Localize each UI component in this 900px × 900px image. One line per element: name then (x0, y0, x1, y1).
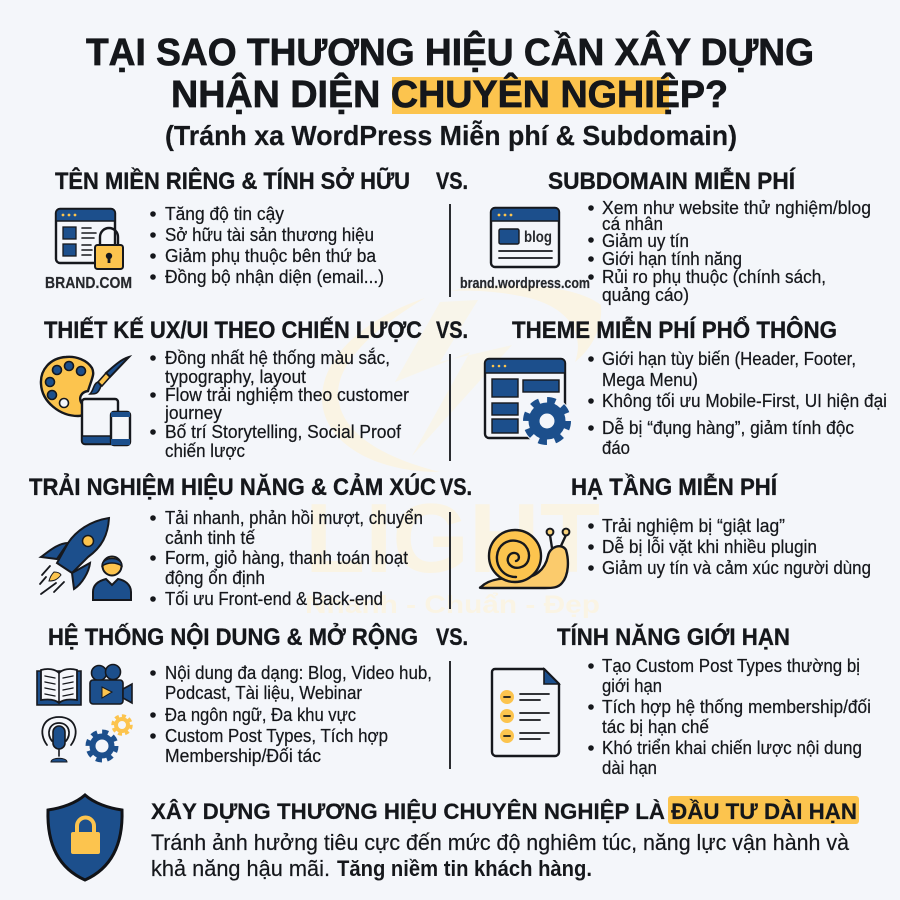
bullet list: free subdomain: Rủi ro phụ thuộc (chính sách, (602, 266, 826, 287)
bullet list: performance and emotion: động ổn định (165, 567, 265, 588)
bullet list: strategic UX/UI: journey (164, 402, 223, 423)
watermark logo: Nhanh - Chuẩn - Đẹp (305, 591, 600, 619)
vs labels: VS. (440, 474, 472, 501)
bullet list: limited features: Tích hợp hệ thống membership/đối (602, 696, 871, 717)
bullet list: content system: Podcast, Tài liệu, Webinar (165, 682, 362, 703)
bullet list: free subdomain: Giảm uy tín (602, 230, 689, 251)
bullet list: custom domain: Đồng bộ nhận diện (email...) (165, 266, 384, 287)
callout text: Tăng niềm tin khách hàng. (337, 856, 592, 881)
heading: performance and emotion: TRẢI NGHIỆM HIỆU NĂNG & CẢM XÚC (29, 472, 436, 501)
bullet list: custom domain: Sở hữu tài sản thương hiệu (165, 224, 374, 245)
bullet list: custom domain: Tăng độ tin cậy (165, 203, 285, 224)
bullet list: strategic UX/UI: typography, layout (165, 366, 306, 387)
panel: custom domain (45, 166, 410, 292)
bullet list: common free theme: Dễ bị “đụng hàng”, giảm tính độc (602, 417, 854, 438)
bullet list: strategic UX/UI: Bố trí Storytelling, Social Proof (165, 421, 402, 442)
heading: strategic UX/UI: THIẾT KẾ UX/UI THEO CHIẾN LƯỢC (44, 316, 422, 344)
bullet list: common free theme: đáo (602, 437, 630, 458)
icon: rocket and user (40, 518, 131, 600)
bullet list: limited features: tác bị hạn chế (602, 716, 710, 737)
title: (Tránh xa WordPress Miễn phí & Subdomain) (165, 120, 737, 151)
callout text (151, 830, 850, 881)
vs labels (436, 168, 472, 651)
callout text: Tránh ảnh hưởng tiêu cực đến mức độ nghiêm túc, năng lực vận hành và (151, 830, 850, 855)
bullet list: common free theme: Giới hạn tùy biến (Header, Footer, (602, 348, 856, 369)
panel: free infrastructure (480, 472, 871, 588)
heading: custom domain: TÊN MIỀN RIÊNG & TÍNH SỞ HỮU (55, 166, 410, 195)
icon: book, video, podcast and gears (37, 664, 132, 762)
bullet list: free subdomain: cá nhân (602, 213, 663, 234)
bullet list: custom domain: Giảm phụ thuộc bên thứ ba (165, 245, 377, 266)
icon: document checklist (492, 669, 559, 756)
bullet list: free subdomain (588, 197, 871, 305)
icon: blog browser (460, 208, 590, 292)
bullet list: free infrastructure: Trải nghiệm bị “giật lag” (602, 515, 785, 536)
vs labels: VS. (436, 624, 468, 651)
title: TẠI SAO THƯƠNG HIỆU CẦN XÂY DỰNG (86, 30, 814, 74)
bullet list: content system (150, 662, 432, 766)
bullet list: content system: Nội dung đa dạng: Blog, Video hub, (165, 662, 432, 683)
bullet list: limited features (588, 655, 871, 778)
bullet list: performance and emotion: Tối ưu Front-end & Back-end (165, 588, 383, 609)
vs labels: VS. (436, 317, 468, 344)
bullet list: common free theme: Mega Menu) (602, 369, 698, 390)
icon: blog browser: brand.wordpress.com (460, 275, 590, 292)
heading: content system: HỆ THỐNG NỘI DUNG & MỞ RỘNG (48, 622, 418, 651)
bullet list: content system: Membership/Đối tác (165, 745, 321, 766)
icon: palette, brush and devices (41, 357, 130, 445)
panel: performance and emotion (29, 472, 436, 609)
icon: layout window with gear (485, 359, 572, 446)
icon: browser with padlock (45, 209, 132, 292)
title (86, 30, 814, 151)
bullet list: limited features: Khó triển khai chiến lược nội dung (602, 737, 862, 758)
bullet list: limited features: giới hạn (602, 675, 662, 696)
icon: shield with padlock (48, 795, 122, 880)
bullet list: free infrastructure: Giảm uy tín và cảm xúc người dùng (602, 557, 871, 578)
bullet list: performance and emotion: Tải nhanh, phản hồi mượt, chuyển (165, 507, 423, 528)
bullet list: content system: Đa ngôn ngữ, Đa khu vực (165, 704, 356, 725)
title: NHẬN DIỆN CHUYÊN NGHIỆP? (171, 72, 728, 116)
bullet list: common free theme: Không tối ưu Mobile-First, UI hiện đại (602, 390, 887, 411)
watermark logo (305, 285, 601, 619)
icon: browser with padlock: BRAND.COM (45, 275, 132, 292)
heading: common free theme: THEME MIỄN PHÍ PHỔ THÔNG (512, 315, 837, 344)
bullet list: performance and emotion (150, 507, 423, 609)
bullet list: strategic UX/UI: Đồng nhất hệ thống màu sắc, (165, 347, 390, 368)
bullet list: content system: Custom Post Types, Tích hợp (165, 725, 388, 746)
bullet list: strategic UX/UI (150, 347, 409, 461)
icon: snail (480, 529, 569, 588)
bullet list: common free theme (588, 348, 887, 458)
panel: content system (37, 622, 432, 766)
panel: free subdomain (460, 166, 871, 305)
heading: free subdomain: SUBDOMAIN MIỄN PHÍ (548, 166, 796, 195)
panel: strategic UX/UI (41, 316, 422, 461)
bullet list: performance and emotion: cảnh tinh tế (165, 527, 256, 548)
bullet list: performance and emotion: Form, giỏ hàng, thanh toán hoạt (165, 547, 408, 568)
bullet list: custom domain (150, 203, 384, 287)
bullet list: free infrastructure (588, 515, 871, 578)
bullet list: limited features: dài hạn (602, 757, 657, 778)
watermark logo: LIGHT (305, 483, 600, 593)
bullet list: free subdomain: quảng cáo) (602, 284, 689, 305)
bullet list: free subdomain: Xem như website thử nghiệm/blog (602, 197, 871, 218)
bullet list: free infrastructure: Dễ bị lỗi vặt khi nhiều plugin (602, 536, 817, 557)
icon: blog browser: blog (524, 229, 552, 246)
bullet list: limited features: Tạo Custom Post Types thường bị (602, 655, 860, 676)
bullet list: free subdomain: Giới hạn tính năng (602, 248, 742, 269)
heading: limited features: TÍNH NĂNG GIỚI HẠN (557, 623, 790, 651)
vs labels: VS. (436, 168, 468, 195)
callout heading: XÂY DỰNG THƯƠNG HIỆU CHUYÊN NGHIỆP LÀ ĐẦU TƯ DÀI HẠN (151, 799, 857, 824)
panel: common free theme (485, 315, 887, 458)
panel: limited features (492, 623, 871, 778)
callout: long-term investment (48, 795, 859, 881)
bullet list: strategic UX/UI: chiến lược (165, 440, 245, 461)
heading: free infrastructure: HẠ TẦNG MIỄN PHÍ (571, 472, 778, 501)
callout text: khả năng hậu mãi. (151, 856, 330, 881)
bullet list: strategic UX/UI: Flow trải nghiệm theo customer (165, 384, 409, 405)
